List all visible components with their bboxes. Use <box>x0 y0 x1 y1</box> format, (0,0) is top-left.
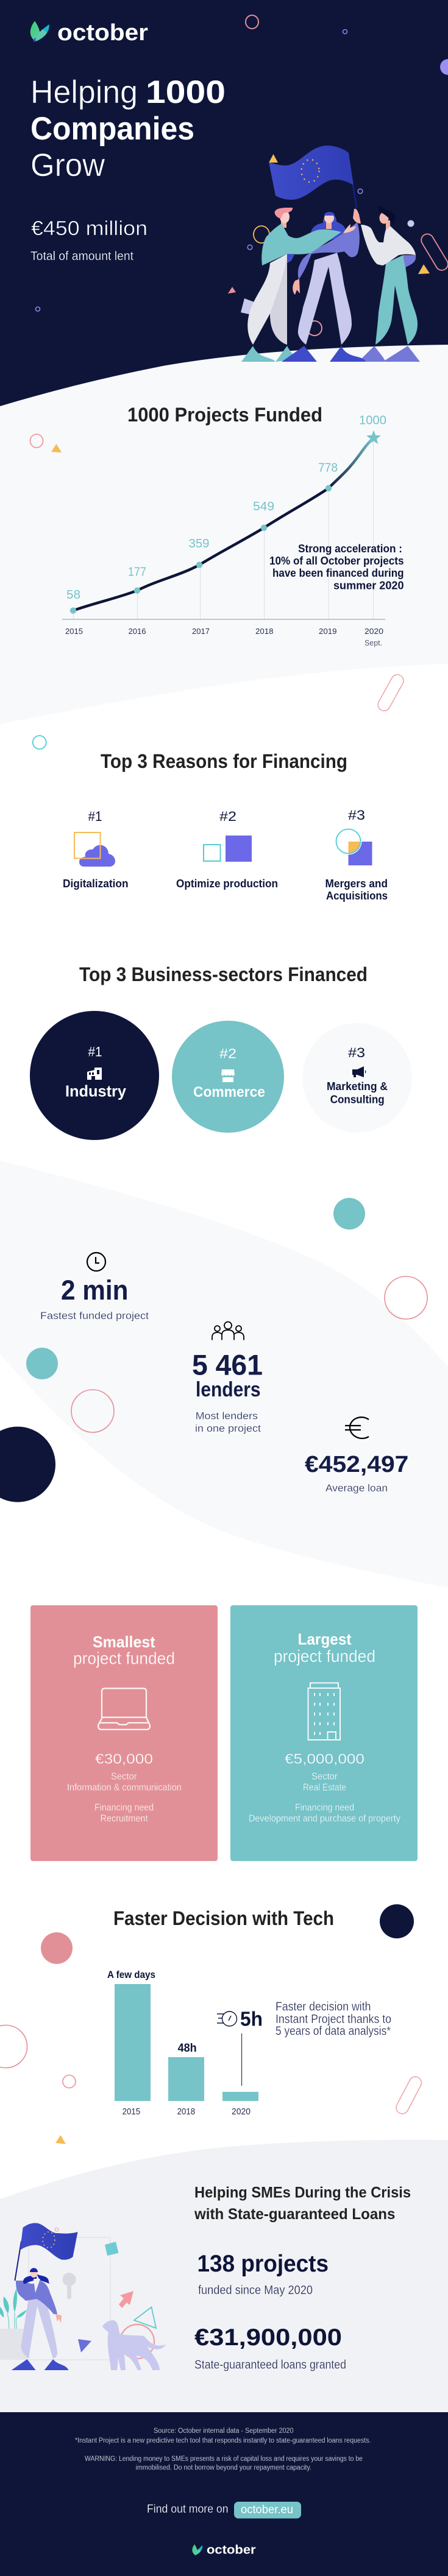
reason 2: optimize production: Optimize production <box>176 878 278 890</box>
reason 2: optimize production: #2 <box>219 809 236 824</box>
icon: tower building <box>308 1683 340 1740</box>
line chart: projects funded per year: 2019 <box>319 627 336 636</box>
heading: top 3 reasons: Top 3 Reasons for Financing <box>101 750 347 772</box>
reason 3: mergers and acquisitions: #3 <box>348 808 365 823</box>
card: smallest project funded: Smallest <box>93 1633 155 1651</box>
stat: average loan: €452,497 <box>305 1452 408 1477</box>
hero amount lent: Total of amount lent <box>30 250 133 263</box>
reason 3: mergers and acquisitions: Mergers and <box>325 878 388 890</box>
line chart: projects funded per year: 778 <box>318 462 338 475</box>
chart section decorations <box>30 434 406 713</box>
line chart: projects funded per year: 2020 <box>364 627 383 636</box>
callout: 5h decision: Faster decision with <box>276 2001 371 2014</box>
card: largest project funded: Development and purchase of property <box>249 1814 400 1824</box>
line chart: projects funded per year: 2018 <box>255 627 273 636</box>
footer source and warning notes: Source: October internal data - September 2020 <box>154 2427 294 2435</box>
reason 1: digitalization: Digitalization <box>63 878 128 890</box>
sector 2: commerce: Commerce <box>193 1084 265 1100</box>
card: smallest project funded: Sector <box>111 1772 137 1782</box>
stat: 138 projects: 138 projects <box>197 2251 329 2277</box>
stat: 138 projects <box>197 2251 329 2297</box>
icon: euro <box>345 1417 369 1438</box>
footer source and warning notes: *Instant Project is a new predictive tech tool that responds instantly to state-guaranteed loans requests. <box>75 2437 371 2444</box>
line chart: projects funded per year: 2015 <box>65 627 83 636</box>
door with keyhole <box>29 2237 110 2360</box>
footer source and warning notes: WARNING: Lending money to SMEs presents a risk of capital loss and requires your savings to be <box>85 2455 363 2463</box>
callout: 5h decision: 5 years of data analysis* <box>276 2025 391 2038</box>
sector 3: marketing and consulting: Consulting <box>330 1094 385 1106</box>
hero title: Companies <box>30 111 194 147</box>
icon: two squares <box>204 836 252 862</box>
bar chart: decision time: A few days <box>107 1969 155 1980</box>
stat: 138 projects: funded since May 2020 <box>198 2284 313 2297</box>
stat: 5 461 lenders: Most lenders <box>196 1410 258 1422</box>
chart section heading: 1000 Projects Funded <box>127 404 322 426</box>
icon: EU flag <box>269 146 357 208</box>
person: middle with blue hair <box>293 212 360 345</box>
line chart: projects funded per year: 549 <box>253 500 274 513</box>
stat: average loan: Average loan <box>325 1482 388 1494</box>
call to action: october.eu <box>241 2504 293 2516</box>
card: largest project funded: project funded <box>274 1647 375 1666</box>
line chart: projects funded per year: 1000 <box>359 413 386 427</box>
stat: 5 461 lenders: lenders <box>196 1378 261 1401</box>
plant in pot <box>0 2289 27 2360</box>
floating shapes <box>78 2242 156 2359</box>
crisis heading: with State-guaranteed Loans <box>194 2206 395 2223</box>
stat: 5 461 lenders <box>192 1321 263 1434</box>
stat: state-guaranteed loans <box>194 2324 346 2371</box>
callout: 5h decision <box>217 2001 391 2038</box>
bar chart: decision time <box>107 1969 258 2117</box>
hero title: Grow <box>30 147 105 183</box>
card: largest project funded: Largest <box>297 1630 352 1649</box>
icon: cloud and square <box>74 832 115 867</box>
footer background <box>0 2412 448 2576</box>
dog <box>102 2320 166 2370</box>
teal shirt of left person <box>261 223 341 266</box>
line chart: projects funded per year: 2016 <box>128 627 146 636</box>
reason 3: mergers and acquisitions <box>325 808 388 902</box>
stat: average loan <box>305 1417 408 1494</box>
line chart: projects funded per year: 177 <box>128 566 146 579</box>
card: largest project funded: Sector <box>311 1772 338 1782</box>
stats section background <box>0 1161 448 1588</box>
crisis heading <box>194 2184 411 2223</box>
line chart: projects funded per year: 58 <box>66 588 80 602</box>
hero decorative shapes <box>35 15 448 336</box>
icon: stopwatch <box>217 2011 236 2026</box>
faster decision decorations <box>0 1904 424 2144</box>
stat: state-guaranteed loans: €31,900,000 <box>194 2324 342 2351</box>
card: smallest project funded: Recruitment <box>100 1814 148 1824</box>
callout: strong acceleration: summer 2020 <box>333 579 404 591</box>
sector 1: industry: #1 <box>88 1044 102 1060</box>
callout: strong acceleration: have been financed during <box>272 567 404 579</box>
sector 1: industry <box>30 1011 159 1140</box>
stat: 5 461 lenders: in one project <box>195 1423 261 1434</box>
stats decorations <box>0 1198 427 1502</box>
bar chart: decision time: 2015 <box>123 2106 140 2117</box>
sector 2: commerce <box>172 1021 284 1133</box>
stat: state-guaranteed loans: State-guaranteed loans granted <box>194 2358 346 2371</box>
reason 3: mergers and acquisitions: Acquisitions <box>326 890 388 902</box>
person: left with pink hair <box>241 208 299 362</box>
logo: october: october <box>57 20 148 46</box>
card: largest project funded: Real Estate <box>303 1782 346 1793</box>
stat: 2 min <box>40 1253 149 1321</box>
hero amount lent: €450 million <box>31 217 148 239</box>
stat: 5 461 lenders: 5 461 <box>192 1349 263 1381</box>
sector 3: marketing and consulting: #3 <box>348 1045 365 1060</box>
heading: faster decision: Faster Decision with Tech <box>113 1907 334 1929</box>
call to action <box>147 2502 301 2519</box>
callout: 5h decision: Instant Project thanks to <box>276 2013 391 2026</box>
card: largest project funded <box>230 1605 418 1861</box>
icon: three people <box>212 1321 244 1340</box>
bar chart: decision time: 48h <box>178 2042 197 2055</box>
callout: strong acceleration <box>269 543 404 591</box>
crisis heading: Helping SMEs During the Crisis <box>194 2184 411 2201</box>
shoes: middle and right person <box>282 346 420 362</box>
callout: 5h decision: 5h <box>240 2008 263 2030</box>
callout: strong acceleration: Strong acceleration : <box>298 543 402 555</box>
reason 1: digitalization <box>63 809 128 890</box>
decorative ring: teal <box>33 736 46 749</box>
card: smallest project funded: Information & communication <box>67 1782 182 1793</box>
sector 3: marketing and consulting: Marketing & <box>327 1080 388 1093</box>
line chart: projects funded per year: 2017 <box>192 627 210 636</box>
line chart: projects funded per year: Sept. <box>364 638 382 647</box>
card: smallest project funded: €30,000 <box>95 1751 153 1767</box>
icon: laptop <box>98 1688 150 1730</box>
illustration: woman with flag and dog <box>0 2223 166 2370</box>
hero title <box>30 74 226 183</box>
crisis section background <box>0 2140 448 2412</box>
hero title: 1000 <box>146 74 226 110</box>
reason 1: digitalization: #1 <box>88 809 102 824</box>
reason 2: optimize production <box>176 809 278 890</box>
flag with pole <box>15 2223 77 2281</box>
hero title: Helping <box>30 74 138 110</box>
heading: top 3 business sectors: Top 3 Business-sectors Financed <box>79 963 368 985</box>
icon: overlapping circle and square <box>335 828 372 865</box>
sector 3: marketing and consulting <box>302 1023 412 1133</box>
sector 1: industry: Industry <box>65 1082 127 1100</box>
projects section background <box>0 345 448 724</box>
call to action: Find out more on <box>147 2503 229 2516</box>
person: right with dark hair <box>343 206 418 345</box>
icon: clock <box>87 1253 105 1271</box>
footer source and warning notes: immobilised. Do not borrow beyond your repayment capacity. <box>136 2465 311 2472</box>
icon: store <box>221 1069 235 1082</box>
footer source and warning notes <box>75 2427 371 2472</box>
woman <box>12 2268 69 2370</box>
line chart: projects funded per year <box>62 413 386 647</box>
card: smallest project funded: Financing need <box>94 1803 154 1813</box>
icon: building <box>87 1068 102 1080</box>
hero background <box>0 0 448 409</box>
callout: strong acceleration: 10% of all October projects <box>269 555 404 567</box>
icon: megaphone <box>352 1066 366 1077</box>
stat: 2 min: 2 min <box>61 1275 128 1306</box>
hero amount lent <box>30 217 148 263</box>
stat: 2 min: Fastest funded project <box>40 1310 149 1321</box>
line chart: projects funded per year: 359 <box>189 537 210 551</box>
card: smallest project funded <box>30 1605 218 1861</box>
bar chart: decision time: 2020 <box>232 2106 251 2117</box>
sector 2: commerce: #2 <box>219 1046 236 1061</box>
bar chart: decision time: 2018 <box>177 2106 195 2117</box>
card: smallest project funded: project funded <box>73 1649 175 1668</box>
card: largest project funded: €5,000,000 <box>285 1751 364 1767</box>
footer logo: october <box>207 2543 256 2557</box>
card: largest project funded: Financing need <box>295 1803 354 1813</box>
illustration: three people raising EU flag <box>241 146 420 362</box>
